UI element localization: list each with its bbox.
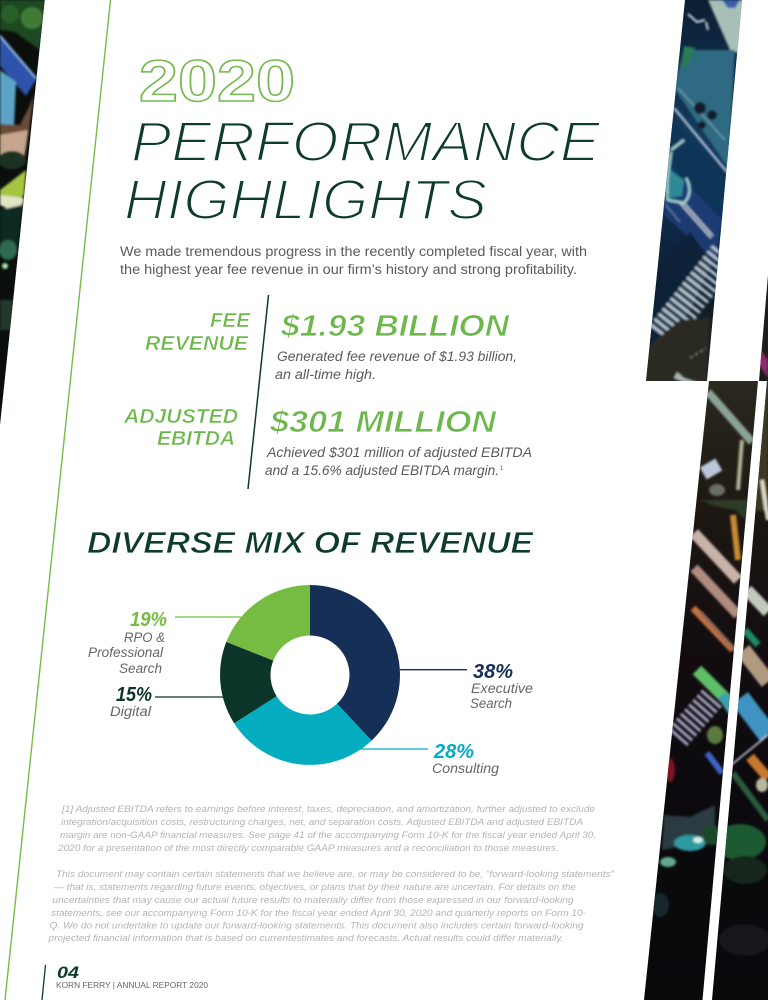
fee revenue value: $1.93 BILLION — [280, 308, 510, 343]
highlight: fee revenue — [145, 308, 517, 382]
photo strip: upper right crossing — [640, 0, 745, 386]
title line PERFORMANCE: PERFORMANCE — [131, 110, 601, 174]
callout: 19% RPO and professional search: Professional — [88, 645, 164, 660]
fee revenue label — [145, 309, 251, 355]
photo strip: far right lower traffic — [712, 381, 768, 1000]
green diagonal rule — [5, 0, 110, 1000]
section heading: DIVERSE MIX OF REVENUE — [87, 525, 534, 560]
photo strip: lower right traffic — [640, 381, 765, 1000]
forward-looking statement disclaimer: statements, see our accompanying Form 10-K for the fiscal year ended April 30, 2020 and quarterly reports on Form 10- — [51, 908, 586, 919]
adjusted EBITDA label: EBITDA — [157, 427, 235, 450]
photo strip: left aerial city — [0, 0, 46, 426]
forward-looking statement disclaimer: This document may contain certain statements that we believe are, or may be considered to be, “forward-looking statements” — [56, 869, 615, 880]
adjusted EBITDA value: $301 MILLION — [269, 404, 497, 439]
intro text: the highest year fee revenue in our firm’s history and strong profitability. — [120, 262, 577, 277]
segment: digital 15% — [220, 642, 277, 723]
callout: 19% RPO and professional search: Search — [119, 661, 162, 676]
page footer — [42, 963, 208, 1000]
title line HIGHLIGHTS: HIGHLIGHTS — [124, 168, 487, 232]
callout: 28% consulting: Consulting — [432, 761, 500, 776]
footnote: margin are non-GAAP financial measures. See page 41 of the accompanying Form 10-K for the fiscal year ended April 30, — [60, 830, 596, 841]
callout: 19% RPO and professional search: RPO & — [124, 630, 165, 645]
intro text — [120, 244, 587, 277]
callout: 38% executive search: Executive — [471, 681, 533, 696]
footnote: [1] Adjusted EBITDA refers to earnings before interest, taxes, depreciation, and amortization, further adjusted to exclude — [61, 804, 595, 815]
forward-looking statement disclaimer: projected financial information that is based on currentestimates and forecasts. Actual results could differ materially. — [47, 933, 563, 944]
title — [124, 49, 601, 232]
intro text: We made tremendous progress in the recently completed fiscal year, with — [120, 244, 587, 259]
adjusted EBITDA label — [123, 405, 238, 450]
callout: 38% executive search — [400, 661, 533, 711]
donut chart: revenue mix — [220, 585, 400, 765]
adjusted EBITDA description: 1 — [500, 466, 504, 472]
forward-looking statement disclaimer — [47, 869, 615, 944]
callout: 15% digital: Digital — [110, 704, 152, 719]
forward-looking statement disclaimer: uncertainties that may cause our actual future results to materially differ from those expressed in our forward-looking — [52, 895, 574, 906]
segment: RPO and professional search 19% — [226, 585, 310, 660]
adjusted EBITDA description: and a 15.6% adjusted EBITDA margin. — [265, 463, 499, 478]
footnote: integration/acquisition costs, restructuring charges, net, and separation costs. Adjusted EBITDA and adjusted EBITDA — [61, 817, 583, 828]
callout: 19% RPO and professional search: 19% — [130, 609, 167, 631]
highlights divider — [248, 295, 268, 489]
segment: consulting 28% — [234, 696, 372, 765]
highlight: adjusted EBITDA — [123, 404, 532, 478]
title year 2020 outline: 2020 — [139, 49, 295, 114]
callout: 15% digital — [110, 684, 223, 719]
callout: 28% consulting — [360, 741, 500, 776]
adjusted EBITDA label: ADJUSTED — [123, 405, 238, 428]
segment: executive search 38% — [310, 585, 400, 741]
report name: KORN FERRY | ANNUAL REPORT 2020 — [56, 980, 208, 990]
callout: 38% executive search: Search — [470, 696, 512, 711]
fee revenue label: FEE — [210, 309, 251, 332]
footnote — [57, 804, 596, 854]
callout: 28% consulting: 28% — [433, 741, 474, 763]
fee revenue description: an all-time high. — [275, 367, 376, 382]
fee revenue description: Generated fee revenue of $1.93 billion, — [277, 349, 517, 364]
callout: 19% RPO and professional search — [88, 609, 241, 676]
footnote: 2020 for a presentation of the most directly comparable GAAP measures and a reconciliation to those measures. — [57, 843, 559, 854]
callout: 15% digital: 15% — [116, 684, 152, 706]
callout: 38% executive search: 38% — [473, 661, 513, 683]
photo strip: far right upper sliver — [759, 276, 768, 381]
forward-looking statement disclaimer: — that is, statements regarding future events, objectives, or plans that by their nature are uncertain. For details on the — [53, 882, 576, 893]
adjusted EBITDA description — [265, 445, 532, 478]
fee revenue description — [275, 349, 517, 382]
forward-looking statement disclaimer: Q. We do not undertake to update our forward-looking statements. This document also includes certain forward-looking — [50, 920, 584, 932]
page number: 04 — [57, 963, 80, 982]
fee revenue label: REVENUE — [145, 332, 249, 355]
adjusted EBITDA description: Achieved $301 million of adjusted EBITDA — [266, 445, 532, 460]
